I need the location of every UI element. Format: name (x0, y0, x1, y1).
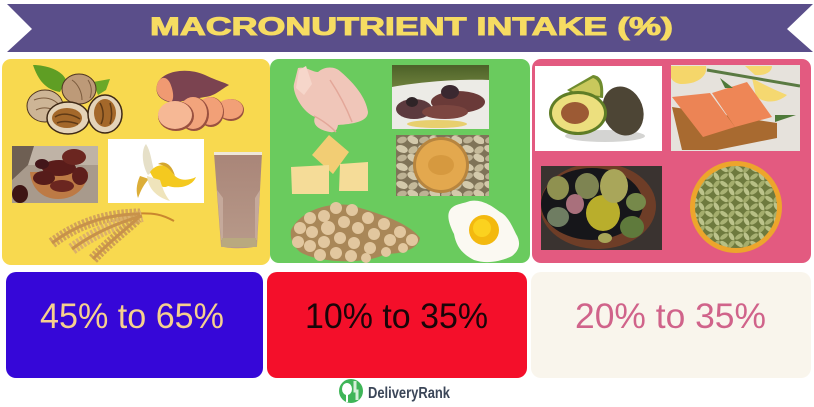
fat range box (531, 272, 811, 378)
carbohydrate range box: 45% to 65% (40, 297, 224, 336)
icon: fried egg (448, 201, 519, 262)
icon: sweet potato (157, 71, 244, 131)
title: MACRONUTRIENT INTAKE (%) (150, 13, 673, 41)
title banner (7, 4, 813, 52)
image: hummus and beans (396, 135, 489, 196)
panel: protein foods (270, 59, 530, 263)
image: avocado (535, 66, 662, 151)
fat range box: 20% to 35% (575, 297, 766, 336)
logo: DeliveryRank: DeliveryRank (368, 385, 450, 402)
icon: bowl of pumpkin seeds (690, 161, 782, 253)
protein range box (267, 272, 527, 378)
icon: cheese cubes (291, 135, 368, 194)
image: banana (108, 139, 204, 203)
image: olives in bowl (540, 163, 662, 250)
logo: DeliveryRank (339, 379, 450, 403)
image: octopus dish (392, 65, 489, 129)
icon: walnuts (27, 65, 122, 134)
protein range box: 10% to 35% (305, 297, 488, 336)
panel: carbohydrates foods (2, 59, 270, 265)
image: dates in bowl (12, 146, 98, 203)
icon: chocolate milk glass (214, 152, 262, 248)
panel: fat foods (532, 59, 811, 263)
icon: chickpeas (291, 202, 420, 263)
carbohydrate range box (6, 272, 263, 378)
icon: wheat (52, 213, 174, 259)
icon: raw chicken (294, 66, 368, 132)
image: salmon on board (671, 65, 800, 151)
